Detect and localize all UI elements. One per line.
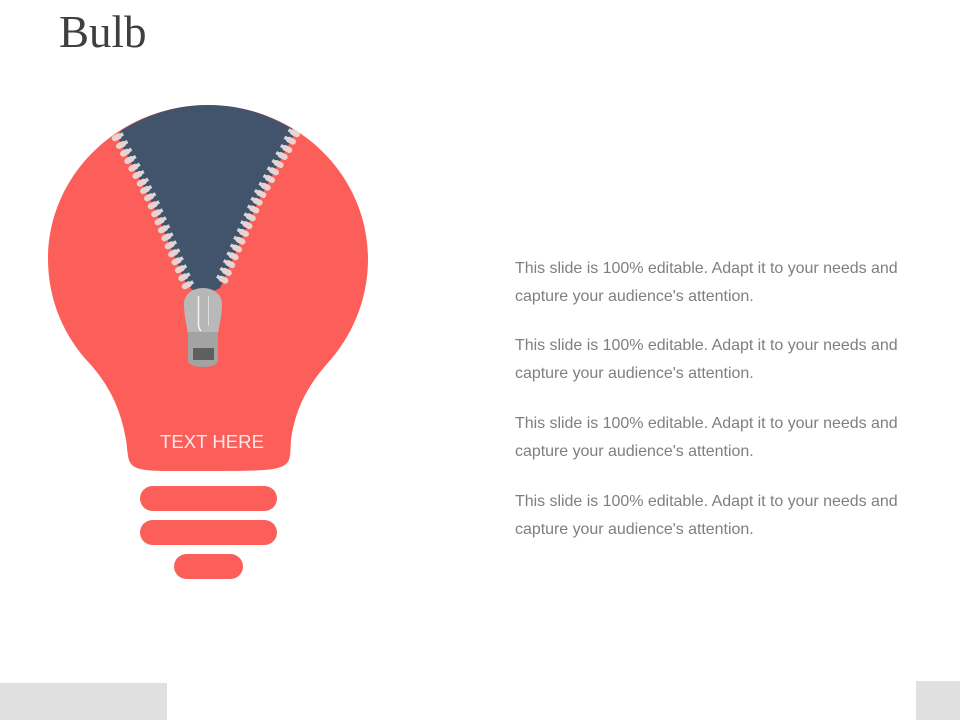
text block 3 <box>515 415 898 460</box>
zipper teeth <box>115 130 297 286</box>
zipper slider <box>184 288 222 367</box>
text block 4: capture your audience's attention. <box>515 521 754 538</box>
text block 1: This slide is 100% editable. Adapt it to your needs and <box>515 260 898 277</box>
text block 1 <box>515 260 898 305</box>
text block 4: This slide is 100% editable. Adapt it to your needs and <box>515 493 898 510</box>
bulb body <box>48 105 368 471</box>
dark wedge opening <box>117 105 295 296</box>
right teeth <box>221 132 297 281</box>
text block 2 <box>515 337 898 382</box>
left tooth stems <box>119 134 193 284</box>
bulb label: TEXT HERE <box>160 431 264 452</box>
text block 3: This slide is 100% editable. Adapt it to your needs and <box>515 415 898 432</box>
footer block right <box>916 681 960 720</box>
footer block left <box>0 683 167 720</box>
text block 3: capture your audience's attention. <box>515 443 754 460</box>
title: Bulb <box>59 7 147 57</box>
text block 2: This slide is 100% editable. Adapt it to your needs and <box>515 337 898 354</box>
text block 1: capture your audience's attention. <box>515 288 754 305</box>
right tooth stems <box>217 130 293 279</box>
bulb base bars <box>140 486 277 579</box>
left teeth <box>115 136 189 286</box>
text block 4 <box>515 493 898 538</box>
text block 2: capture your audience's attention. <box>515 365 754 382</box>
